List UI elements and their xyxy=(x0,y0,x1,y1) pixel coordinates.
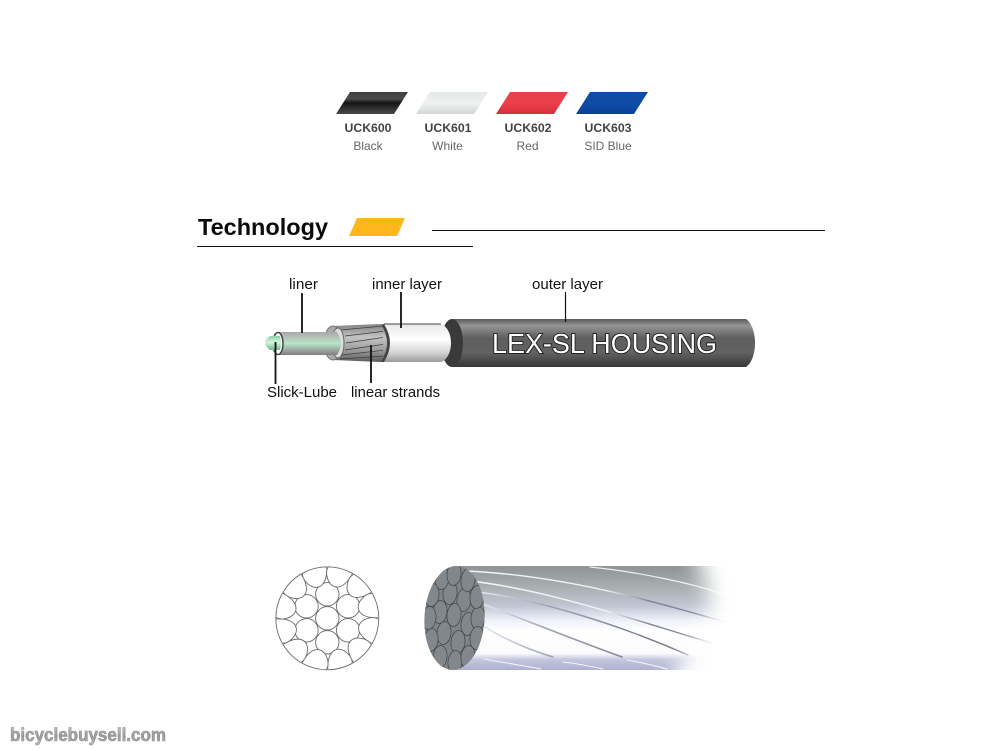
swatch: UCK603 SID Blue: SID Blue xyxy=(584,139,632,153)
label: linear strands: linear strands xyxy=(351,384,440,401)
strands: outer twelve segments xyxy=(270,561,384,675)
swatch: UCK601 White xyxy=(416,92,488,153)
diagram: wire cross-section xyxy=(270,561,384,675)
cable print: LEX-SL HOUSING: LEX-SL HOUSING xyxy=(492,328,717,359)
swatch: UCK600 Black xyxy=(336,92,408,153)
diagram: stranded inner wire xyxy=(424,566,722,670)
panel: colour swatches xyxy=(336,92,648,153)
cable: linear strands xyxy=(324,324,387,362)
label: outer layer: outer layer xyxy=(532,276,603,293)
wire cut face xyxy=(424,566,485,670)
label: linear strands xyxy=(351,345,440,401)
cable: outer layer xyxy=(441,319,755,367)
swatch: UCK602 Red: Red xyxy=(516,139,539,153)
strands: central seven circles xyxy=(295,583,360,654)
swatch: UCK601 White: White xyxy=(432,139,463,153)
cable: liner xyxy=(278,332,341,355)
swatch: UCK603 SID Blue: UCK603 xyxy=(584,121,632,135)
swatch: UCK602 Red xyxy=(496,92,568,153)
swatch: UCK601 White: UCK601 xyxy=(424,121,472,135)
label: inner layer xyxy=(372,276,442,328)
cable: inner layer xyxy=(378,324,451,362)
swatch: UCK600 Black: Black xyxy=(353,139,384,153)
swatch: UCK602 Red: UCK602 xyxy=(504,121,552,135)
swatch: UCK600 Black: UCK600 xyxy=(344,121,392,135)
watermark: bicyclebuysell.com: bicyclebuysell.com xyxy=(10,725,166,745)
label: Slick-Lube: Slick-Lube xyxy=(267,384,337,401)
swatch: UCK603 SID Blue xyxy=(576,92,648,153)
label: liner xyxy=(289,276,318,333)
heading: Technology: Technology xyxy=(198,214,328,240)
wire body xyxy=(455,566,722,670)
cable: slick-lube tip xyxy=(265,332,283,354)
label: Slick-Lube xyxy=(267,342,337,401)
icon: yellow parallelogram accent xyxy=(349,218,405,236)
label: inner layer: inner layer xyxy=(372,276,442,293)
label: outer layer xyxy=(532,276,603,322)
label: liner: liner xyxy=(289,276,318,293)
diagram: cable cutaway xyxy=(265,276,755,401)
